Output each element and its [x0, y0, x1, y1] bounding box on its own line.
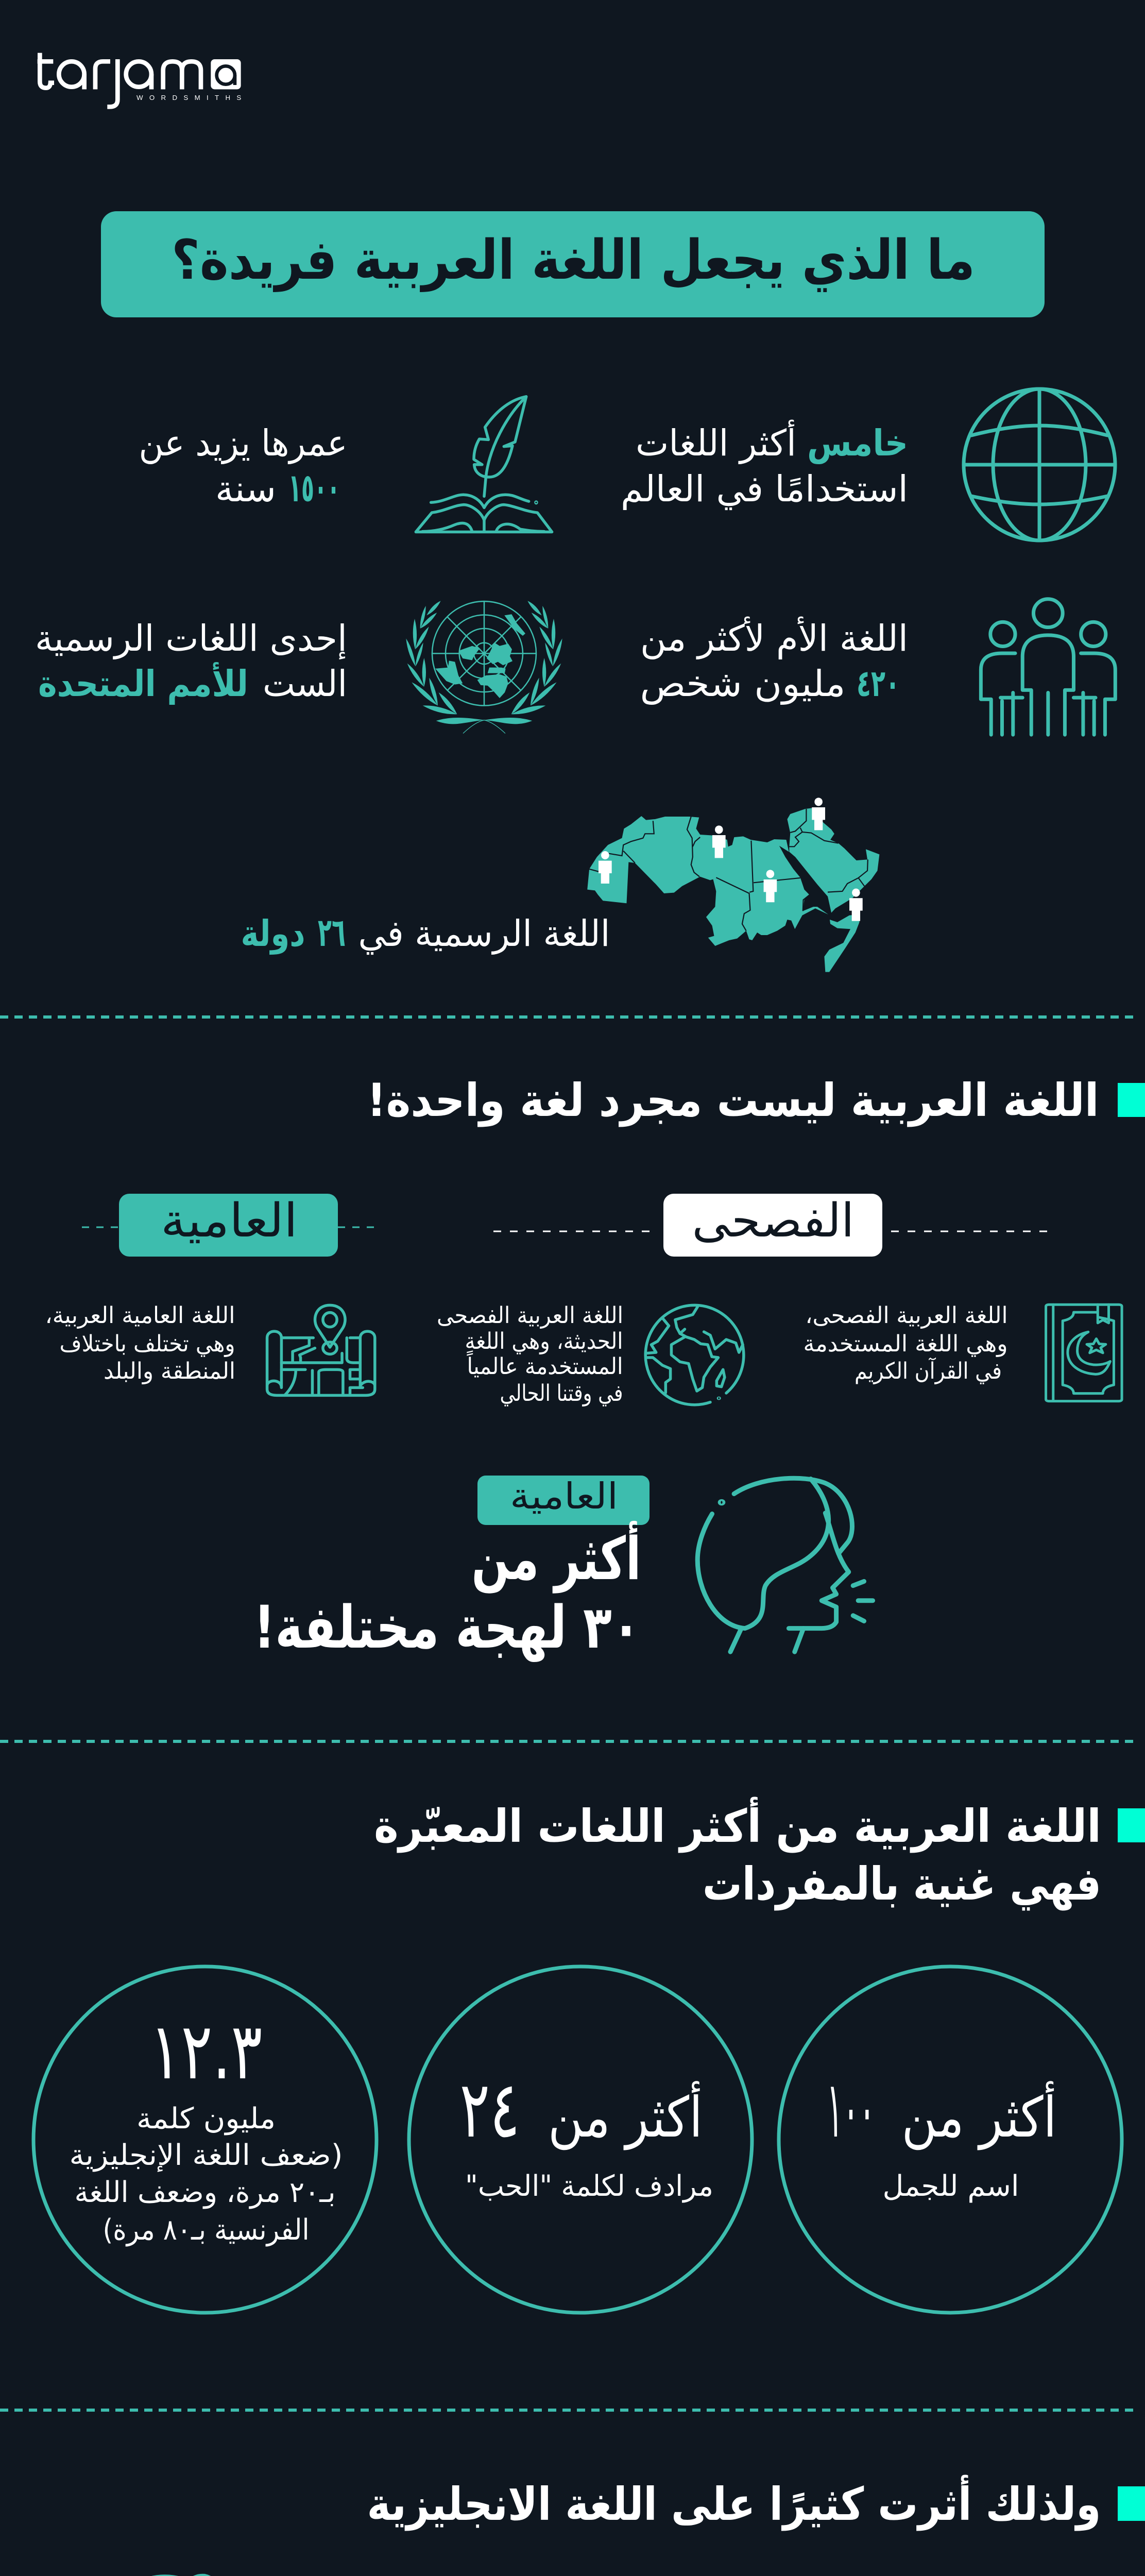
- circle: 12.3 million words: مليون كلمة: [136, 2102, 276, 2136]
- heading: not just one language: اللغة العربية ليست مجرد لغة واحدة!: [367, 1074, 1099, 1127]
- title banner: [101, 211, 1045, 317]
- text: native language: مليون شخص: [640, 663, 846, 705]
- text: Ammiya description: اللغة العامية العربية،: [45, 1302, 235, 1329]
- text: fifth most used: [621, 419, 908, 511]
- text: one of six UN languages: الست: [263, 663, 347, 705]
- text: Ammiya description: [45, 1302, 235, 1384]
- label: Ammiya: العامية: [161, 1194, 298, 1248]
- text: over 30 dialects: [253, 1520, 641, 1662]
- circle: 24 synonyms for love: ٢٤: [459, 2064, 520, 2155]
- icon: people: [981, 599, 1115, 735]
- text: official in 26 countries: [241, 909, 610, 955]
- text: fifth most used: أكثر اللغات: [636, 419, 796, 464]
- label: Fusha: [493, 1194, 1052, 1257]
- icon: globe: [964, 389, 1115, 540]
- icon: people markers: [599, 798, 863, 921]
- text: Fusha modern: المستخدمة عالمياً: [467, 1350, 623, 1380]
- text: official in 26 countries: اللغة الرسمية في: [358, 912, 610, 955]
- text: over 1500 years: [139, 422, 347, 511]
- text: Fusha modern: الحديثة، وهي اللغة: [465, 1328, 623, 1354]
- text: official in 26 countries: دولة: [241, 912, 305, 955]
- circle: 100 names for camel: أكثر من: [901, 2081, 1057, 2150]
- text: over 1500 years: عمرها يزيد عن: [139, 422, 347, 464]
- circle: 12.3 million words: بـ٢٠ مرة، وضعف اللغة: [74, 2176, 336, 2209]
- label: Ammiya small: [477, 1475, 650, 1525]
- circle: 24 synonyms for love: أكثر من: [548, 2081, 703, 2150]
- text: fifth most used: استخدامًا في العالم: [621, 468, 908, 511]
- text: over 30 dialects: ٣٠ لهجة مختلفة!: [253, 1593, 641, 1662]
- icon: lemon: [87, 2575, 237, 2576]
- icon: map with pin: [267, 1305, 375, 1395]
- text: Fusha Quran: وهي اللغة المستخدمة: [804, 1331, 1007, 1357]
- icon: UN emblem: [406, 601, 562, 733]
- text: Ammiya description: وهي تختلف باختلاف: [60, 1331, 235, 1357]
- text: over 30 dialects: أكثر من: [472, 1520, 641, 1594]
- circle: 100 names for camel: [779, 1967, 1122, 2313]
- text: Ammiya description: المنطقة والبلد: [104, 1358, 235, 1384]
- text: one of six UN languages: للأمم المتحدة: [38, 662, 248, 705]
- title banner: ما الذي يجعل اللغة العربية فريدة؟: [172, 228, 975, 292]
- circle: 12.3 million words: [33, 1967, 377, 2313]
- text: Fusha Quran: اللغة العربية الفصحى،: [806, 1302, 1007, 1329]
- heading: most expressive: [374, 1797, 1145, 1911]
- icon: earth: [645, 1305, 744, 1405]
- label: Fusha: الفصحى: [692, 1194, 854, 1248]
- text: native language: ٤٢٠: [857, 662, 900, 705]
- text: one of six UN languages: [35, 617, 347, 705]
- text: Fusha modern: اللغة العربية الفصحى: [437, 1302, 623, 1329]
- circle: 100 names for camel: اسم للجمل: [883, 2170, 1019, 2203]
- text: Fusha modern: في وقتنا الحالي: [500, 1380, 623, 1406]
- text: Fusha Quran: [804, 1302, 1007, 1384]
- icon: feather and book: [416, 397, 552, 532]
- text: native language: [640, 616, 908, 705]
- text: official in 26 countries: ٢٦: [318, 909, 346, 955]
- icon: head speaking: [697, 1478, 873, 1652]
- logo: tarjama top: WORDSMITHS: [136, 94, 241, 101]
- text: fifth most used: خامس: [807, 422, 908, 464]
- text: Fusha Quran: في القرآن الكريم: [855, 1357, 1002, 1384]
- text: one of six UN languages: إحدى اللغات الرسمية: [35, 617, 347, 660]
- circle: 12.3 million words: ١٢.٣: [149, 2006, 263, 2097]
- label: Ammiya: [82, 1194, 376, 1257]
- text: native language: اللغة الأم لأكثر من: [640, 616, 908, 659]
- circle: 24 synonyms for love: مرادف لكلمة "الحب": [465, 2170, 713, 2203]
- map: Arab world: [587, 798, 879, 972]
- text: over 1500 years: ١٥٠٠: [288, 465, 340, 511]
- circle: 100 names for camel: ١٠٠: [827, 2064, 875, 2155]
- icon: Quran: [1046, 1304, 1122, 1401]
- text: Fusha modern: [437, 1302, 623, 1406]
- circle: 12.3 million words: (ضعف اللغة الإنجليزية: [69, 2139, 343, 2172]
- text: over 1500 years: سنة: [215, 468, 276, 510]
- circle: 24 synonyms for love: [409, 1967, 752, 2313]
- label: Ammiya small: العامية: [510, 1475, 618, 1517]
- logo: tarjama top: [38, 53, 241, 107]
- heading: most expressive: اللغة العربية من أكثر اللغات المعبّرة: [374, 1797, 1101, 1853]
- circle: 12.3 million words: الفرنسية بـ٨٠ مرة): [103, 2213, 309, 2247]
